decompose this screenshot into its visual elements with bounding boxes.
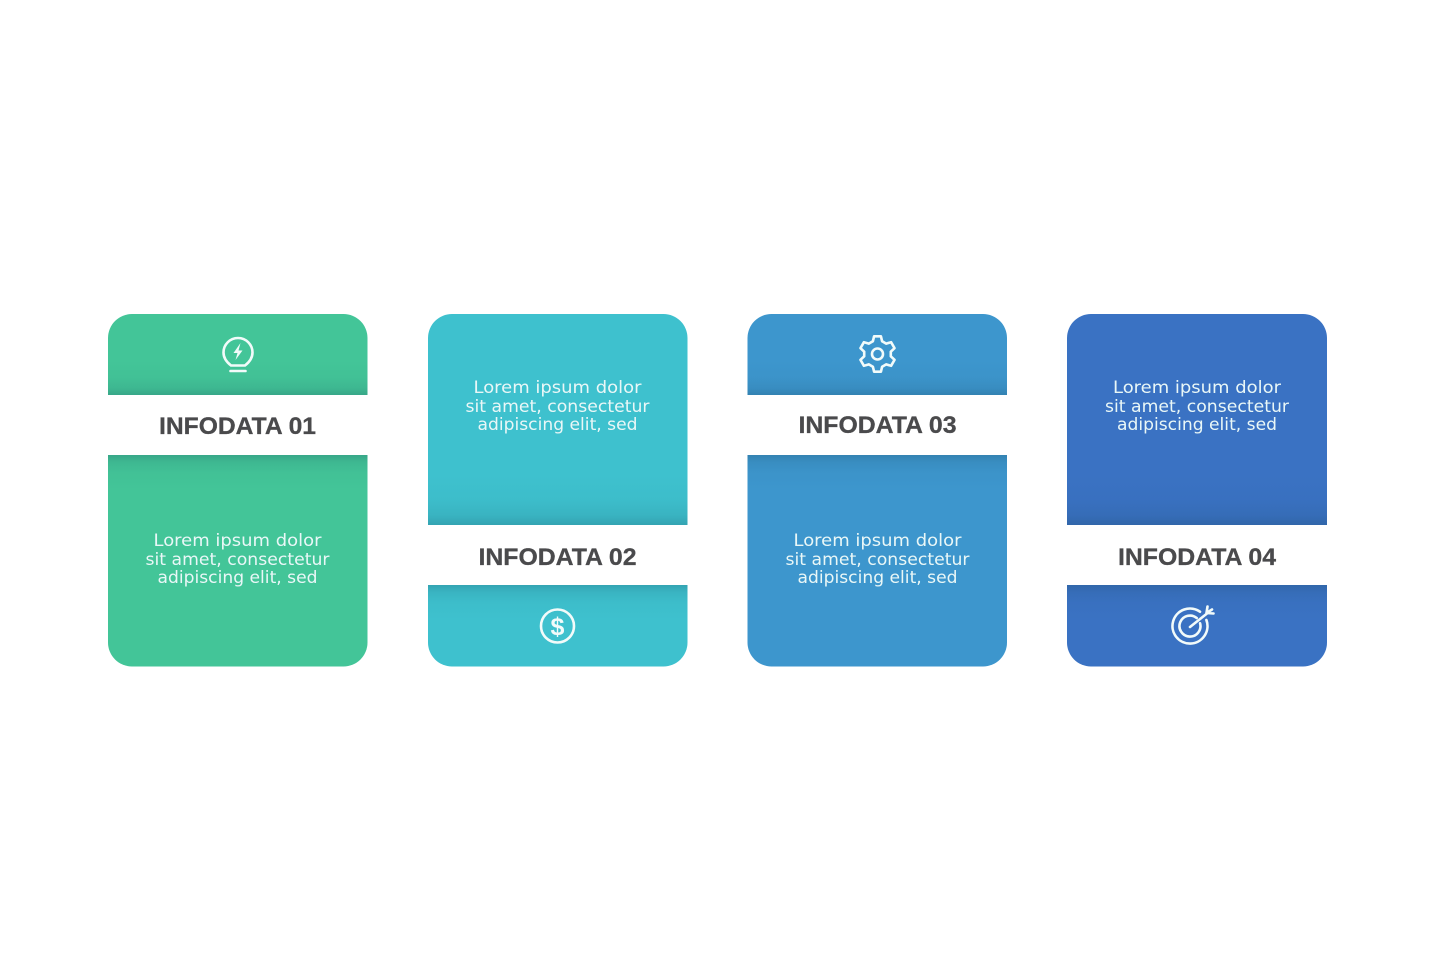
panel: infodata 01 bbox=[108, 314, 368, 666]
body text bbox=[786, 531, 970, 587]
card background bbox=[428, 314, 688, 666]
body text: Lorem ipsum dolor bbox=[154, 531, 322, 550]
icon: gear bbox=[860, 336, 895, 372]
panel: infodata 02 bbox=[428, 314, 688, 666]
heading: INFODATA 04 bbox=[1118, 544, 1277, 571]
heading: INFODATA 01 bbox=[159, 413, 316, 440]
card background bbox=[108, 314, 368, 666]
panel: infodata 03 bbox=[748, 314, 1007, 666]
body text: Lorem ipsum dolor bbox=[474, 378, 642, 397]
body text: Lorem ipsum dolor bbox=[794, 531, 962, 550]
icon: target with arrow bbox=[1172, 606, 1214, 644]
card background bbox=[1067, 314, 1327, 666]
body text: adipiscing elit, sed bbox=[158, 568, 318, 587]
icon: dollar coin: $ bbox=[551, 613, 565, 641]
heading: INFODATA 02 bbox=[478, 544, 636, 571]
panel: infodata 04 bbox=[1067, 314, 1327, 666]
icon: dollar coin bbox=[541, 610, 574, 642]
body text bbox=[1105, 378, 1289, 434]
body text: sit amet, consectetur bbox=[1105, 397, 1289, 416]
body text: Lorem ipsum dolor bbox=[1113, 378, 1281, 397]
heading: INFODATA 03 bbox=[798, 412, 956, 439]
card background bbox=[748, 314, 1007, 666]
body text: adipiscing elit, sed bbox=[798, 568, 958, 587]
body text: adipiscing elit, sed bbox=[478, 415, 638, 434]
body text: sit amet, consectetur bbox=[466, 397, 650, 416]
icon: light bulb bbox=[224, 338, 252, 371]
body text: adipiscing elit, sed bbox=[1117, 415, 1277, 434]
body text: sit amet, consectetur bbox=[146, 550, 330, 569]
body text: sit amet, consectetur bbox=[786, 550, 970, 569]
body text bbox=[146, 531, 330, 587]
body text bbox=[466, 378, 650, 434]
